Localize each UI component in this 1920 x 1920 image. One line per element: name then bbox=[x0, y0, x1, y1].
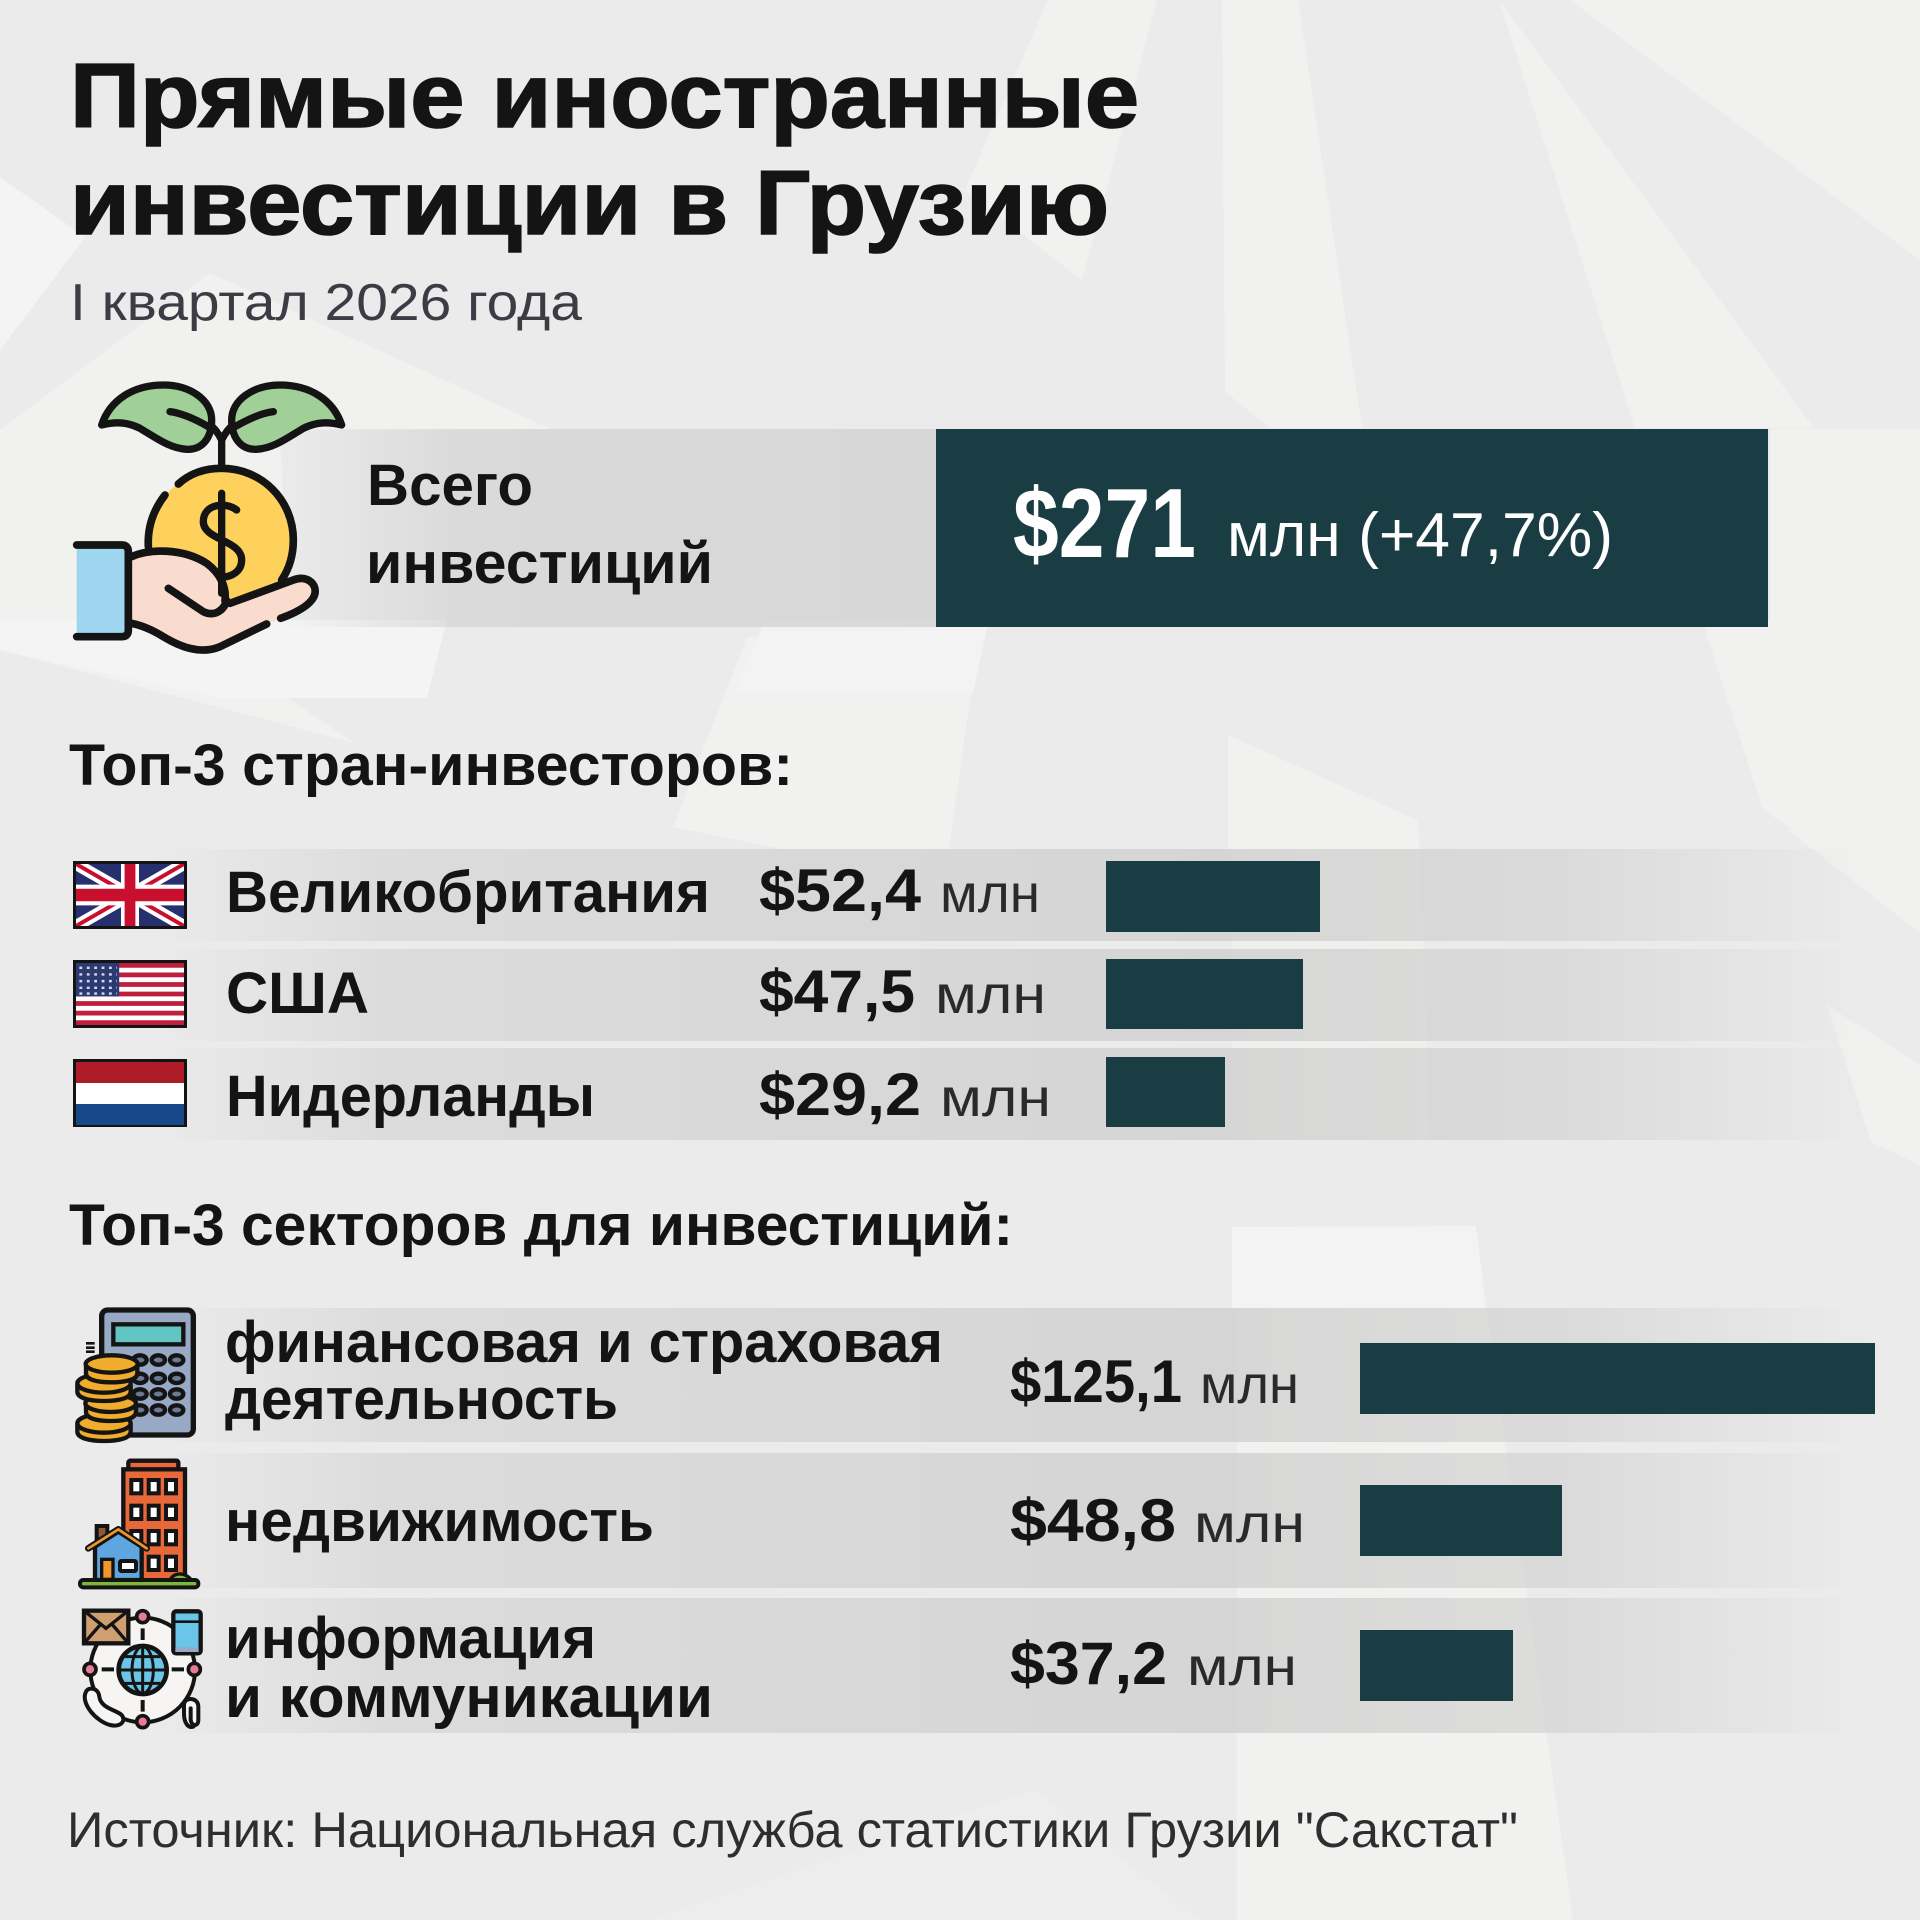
value: млн bbox=[1187, 1637, 1297, 1697]
flag: United Kingdom bbox=[73, 861, 187, 929]
row: USA bbox=[73, 949, 1870, 1041]
value: $29,2 bbox=[759, 1061, 921, 1128]
value: $37,2 bbox=[1010, 1630, 1167, 1697]
country name: Великобритания bbox=[226, 860, 710, 925]
total value: млн (+47,7%) bbox=[1227, 501, 1613, 570]
sector name: финансовая и страховая bbox=[225, 1310, 943, 1375]
total value box bbox=[936, 429, 1768, 627]
total value: $271 bbox=[1013, 468, 1196, 578]
flag: USA bbox=[73, 960, 187, 1028]
country name: Нидерланды bbox=[226, 1064, 595, 1129]
bar bbox=[1360, 1485, 1562, 1556]
value: $47,5 bbox=[759, 958, 915, 1025]
country name: США bbox=[226, 961, 369, 1026]
sector name bbox=[225, 1310, 943, 1432]
flag: Netherlands bbox=[73, 1059, 187, 1127]
value bbox=[759, 1061, 1051, 1128]
heading: top 3 countries: Топ-3 стран-инвесторов: bbox=[69, 733, 793, 798]
row: real estate bbox=[80, 1453, 1870, 1588]
row: Netherlands bbox=[73, 1048, 1870, 1140]
panel: total investments bbox=[77, 385, 1768, 650]
bar bbox=[1360, 1630, 1513, 1701]
panel: top 3 sectors bbox=[77, 1308, 1875, 1733]
bar bbox=[1106, 861, 1320, 932]
subtitle: I квартал 2026 года bbox=[70, 274, 582, 332]
source note: Источник: Национальная служба статистики Грузии "Сакстат" bbox=[67, 1802, 1518, 1858]
sector name: деятельность bbox=[225, 1367, 618, 1432]
icon: hand with coin and sprout bbox=[77, 385, 342, 650]
value bbox=[759, 958, 1046, 1025]
value: млн bbox=[940, 1068, 1051, 1128]
sector name: информация bbox=[225, 1606, 596, 1671]
value: млн bbox=[940, 864, 1040, 924]
row: finance and insurance bbox=[77, 1308, 1875, 1442]
value: $52,4 bbox=[759, 857, 922, 924]
total label: инвестиций bbox=[366, 531, 713, 596]
title bbox=[70, 46, 1139, 254]
value bbox=[1010, 1348, 1299, 1415]
sector name bbox=[225, 1606, 713, 1730]
value: млн bbox=[935, 965, 1046, 1025]
icon: network bbox=[84, 1611, 201, 1728]
value bbox=[1010, 1630, 1297, 1697]
bar bbox=[1106, 959, 1303, 1029]
value: $125,1 bbox=[1010, 1348, 1182, 1415]
panel: top 3 countries bbox=[73, 849, 1870, 1140]
sector name: недвижимость bbox=[225, 1489, 654, 1554]
sector name: и коммуникации bbox=[225, 1665, 713, 1730]
value: $48,8 bbox=[1010, 1487, 1176, 1554]
bar bbox=[1360, 1343, 1875, 1414]
value: млн bbox=[1194, 1494, 1305, 1554]
title: Прямые иностранные bbox=[70, 46, 1139, 147]
total value bbox=[1013, 468, 1613, 578]
icon: buildings bbox=[80, 1461, 198, 1587]
total label: Всего bbox=[367, 453, 533, 518]
heading: top 3 sectors: Топ-3 секторов для инвестиций: bbox=[69, 1193, 1013, 1258]
total band bbox=[280, 429, 940, 627]
title: инвестиции в Грузию bbox=[70, 153, 1109, 254]
icon: calculator and coins bbox=[77, 1310, 193, 1441]
total label bbox=[366, 453, 713, 596]
row: United Kingdom bbox=[73, 849, 1870, 941]
value: млн bbox=[1200, 1355, 1299, 1415]
value bbox=[759, 857, 1040, 924]
value bbox=[1010, 1487, 1305, 1554]
bar bbox=[1106, 1057, 1225, 1127]
row: information and communications bbox=[84, 1598, 1870, 1733]
